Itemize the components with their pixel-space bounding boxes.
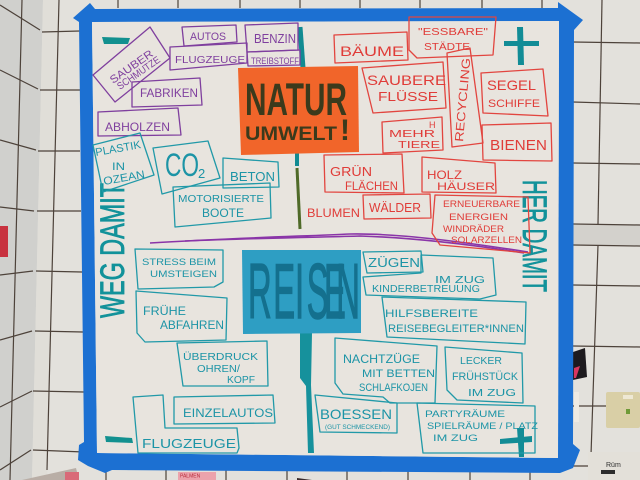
card: segel schiffe: [481, 69, 548, 116]
card: treibstoff: [247, 50, 300, 66]
card: sauber schmutze: [93, 27, 170, 102]
card: nachtzüge: NACHTZÜGE: [343, 352, 420, 366]
card: essbare städte: "ESSBARE": [418, 27, 489, 38]
plus sign top right: [504, 27, 539, 65]
card: boessen: (GUT SCHMECKEND): [325, 425, 390, 431]
card: holzhäuser: HOLZ: [427, 168, 462, 182]
card: bäume: BÄUME: [340, 43, 404, 59]
panel: travel negatives, teal: [133, 249, 275, 453]
card: wälder: [363, 194, 431, 219]
card: kinderbetreuung im zug: IM ZUG: [435, 275, 485, 286]
card: saubere flüsse: SAUBERE: [367, 72, 446, 88]
card: überdruck ohren kopf: ÜBERDRUCK: [183, 351, 258, 363]
card: einzelautos: [174, 395, 275, 424]
card: recycling: RECYCLING: [452, 57, 473, 142]
card: nachtzüge: SCHLAFKOJEN: [359, 382, 428, 394]
card: frühe abfahren: FRÜHE: [143, 304, 186, 318]
card: überdruck ohren kopf: OHREN/: [197, 364, 240, 375]
card: saubere flüsse: [362, 62, 446, 113]
purple divider line: [150, 234, 528, 253]
card: erneuerbare energien: [432, 195, 530, 253]
sticky note: natur umwelt: NATUR: [245, 74, 347, 125]
card: wälder: WÄLDER: [369, 200, 421, 215]
card: nachtzüge: MIT BETTEN: [362, 368, 435, 380]
card: flugzeuge: [133, 395, 239, 453]
centre line top: [297, 27, 303, 229]
card: partyräume: [417, 403, 539, 453]
card: grünflächen: GRÜN: [330, 164, 372, 179]
card: hilfsbereite reisebegleiter: [382, 297, 526, 344]
minus sign top left: [102, 37, 130, 44]
card: saubere flüsse: FLÜSSE: [378, 89, 438, 104]
card: fabriken: FABRIKEN: [140, 86, 198, 100]
card: benzin: BENZIN: [254, 31, 296, 46]
card: segel schiffe: SCHIFFE: [488, 98, 540, 110]
card: kinderbetreuung im zug: [363, 255, 496, 299]
card: überdruck ohren kopf: [177, 341, 268, 386]
card: holzhäuser: HÄUSER: [437, 181, 495, 193]
card: motorisierte boote: BOOTE: [202, 206, 244, 220]
sticky note: natur umwelt: UMWELT: [245, 124, 337, 145]
card: holzhäuser: [422, 157, 496, 193]
card: erneuerbare energien: SOLARZELLEN: [451, 235, 522, 245]
card: hilfsbereite reisebegleiter: HILFSBEREITE: [385, 308, 478, 320]
card: essbare städte: STÄDTE: [424, 41, 470, 53]
card: einzelautos: EINZELAUTOS: [183, 406, 273, 420]
card: plastik in ozean: PLASTIK: [94, 139, 142, 159]
panel: environment negatives, teal: [93, 133, 279, 227]
card: stress beim umsteigen: [135, 249, 223, 289]
card: autos: AUTOS: [190, 31, 226, 43]
panel: environment positives, red: [307, 17, 552, 253]
card: mehr tiere: TIERE: [398, 140, 440, 151]
panel: environment negatives, purple: [93, 23, 300, 136]
card: beton: BETON: [230, 169, 275, 184]
flipchart paper: [92, 21, 559, 458]
card: zügen: [363, 251, 423, 273]
card: partyräume: SPIELRÄUME / PLATZ: [427, 421, 539, 431]
card: zügen: ZÜGEN: [368, 255, 420, 270]
card: boessen: [315, 395, 397, 433]
side label: her damit: HER DAMIT: [515, 180, 553, 292]
card: motorisierte boote: MOTORISIERTE: [178, 194, 264, 205]
sticky note: reisen: REISEN: [248, 248, 360, 335]
card: erneuerbare energien: ERNEUERBARE: [443, 199, 520, 209]
card: erneuerbare energien: ENERGIEN: [449, 212, 508, 222]
card: stress beim umsteigen: UMSTEIGEN: [150, 269, 217, 280]
sticky note: natur umwelt: [238, 66, 359, 155]
card: segel schiffe: SEGEL: [487, 77, 536, 93]
card: fabriken: [132, 78, 202, 107]
card: autos: [182, 25, 237, 46]
card: partyräume: IM ZUG: [433, 433, 478, 443]
card: leckeres frühstück: IM ZUG: [468, 388, 516, 399]
card: flugzeuge: [170, 43, 247, 70]
card: partyräume: PARTYRÄUME: [425, 409, 505, 419]
card: grünflächen: FLÄCHEN: [345, 179, 398, 193]
card: bäume: [334, 32, 408, 63]
card: abholzen: [98, 108, 181, 136]
card: sauber schmutze: SAUBER: [108, 48, 156, 86]
card: kinderbetreuung im zug: KINDERBETREUUNG: [372, 284, 480, 295]
card: nachtzüge: [335, 338, 437, 403]
blue tape frame: [73, 2, 583, 473]
card: flugzeuge: FLUGZEUGE: [142, 436, 236, 451]
card: frühe abfahren: ABFAHREN: [160, 318, 224, 332]
card: benzin: [245, 23, 298, 52]
panel: travel positives, teal: [315, 251, 539, 453]
card: plastik in ozean: IN: [112, 161, 125, 173]
minus sign bottom left: [105, 436, 133, 443]
sticky note: natur umwelt: !: [340, 114, 350, 147]
wall stickers and switch: PALMEN: [180, 474, 201, 480]
card: bienen: [482, 123, 552, 161]
card: co2: [153, 141, 220, 194]
card: bienen: BIENEN: [490, 137, 547, 154]
plus sign bottom right: [500, 428, 532, 457]
centre line bottom: [300, 333, 314, 453]
card: frühe abfahren: [136, 291, 227, 342]
label: blumen: BLUMEN: [307, 206, 360, 220]
card: abholzen: ABHOLZEN: [105, 120, 170, 134]
card: leckeres frühstück: LECKER: [460, 356, 502, 367]
wall stickers and switch: [0, 226, 640, 480]
card: flugzeuge: FLUGZEUGE: [175, 55, 245, 66]
card: stress beim umsteigen: STRESS BEIM: [142, 257, 216, 268]
side label: weg damit: WEG DAMIT: [94, 183, 132, 318]
card: boessen: BOESSEN: [320, 406, 392, 422]
card: mehr tiere: [382, 117, 443, 153]
card: sauber schmutze: SCHMUTZE: [115, 55, 163, 92]
card: motorisierte boote: [173, 183, 271, 227]
card: plastik in ozean: OZEAN: [102, 169, 146, 188]
card: grünflächen: [324, 154, 404, 193]
card: hilfsbereite reisebegleiter: REISEBEGLEITER*INNEN: [388, 323, 524, 335]
card: recycling: [447, 48, 483, 147]
card: essbare städte: [409, 17, 496, 58]
card: erneuerbare energien: WINDRÄDER: [443, 224, 505, 234]
card: co2: CO: [165, 147, 199, 183]
card: plastik in ozean: [93, 133, 154, 192]
card: mehr tiere: H: [429, 120, 436, 130]
card: co2: 2: [198, 166, 205, 181]
wall stickers and switch: Rüm: [606, 462, 621, 469]
card: mehr tiere: MEHR: [389, 129, 435, 140]
card: leckeres frühstück: FRÜHSTÜCK: [452, 371, 519, 383]
card: überdruck ohren kopf: KOPF: [227, 375, 255, 386]
card: beton: [223, 158, 279, 188]
card: treibstoff: TREIBSTOFF: [251, 56, 299, 66]
card: leckeres frühstück: [445, 347, 523, 403]
